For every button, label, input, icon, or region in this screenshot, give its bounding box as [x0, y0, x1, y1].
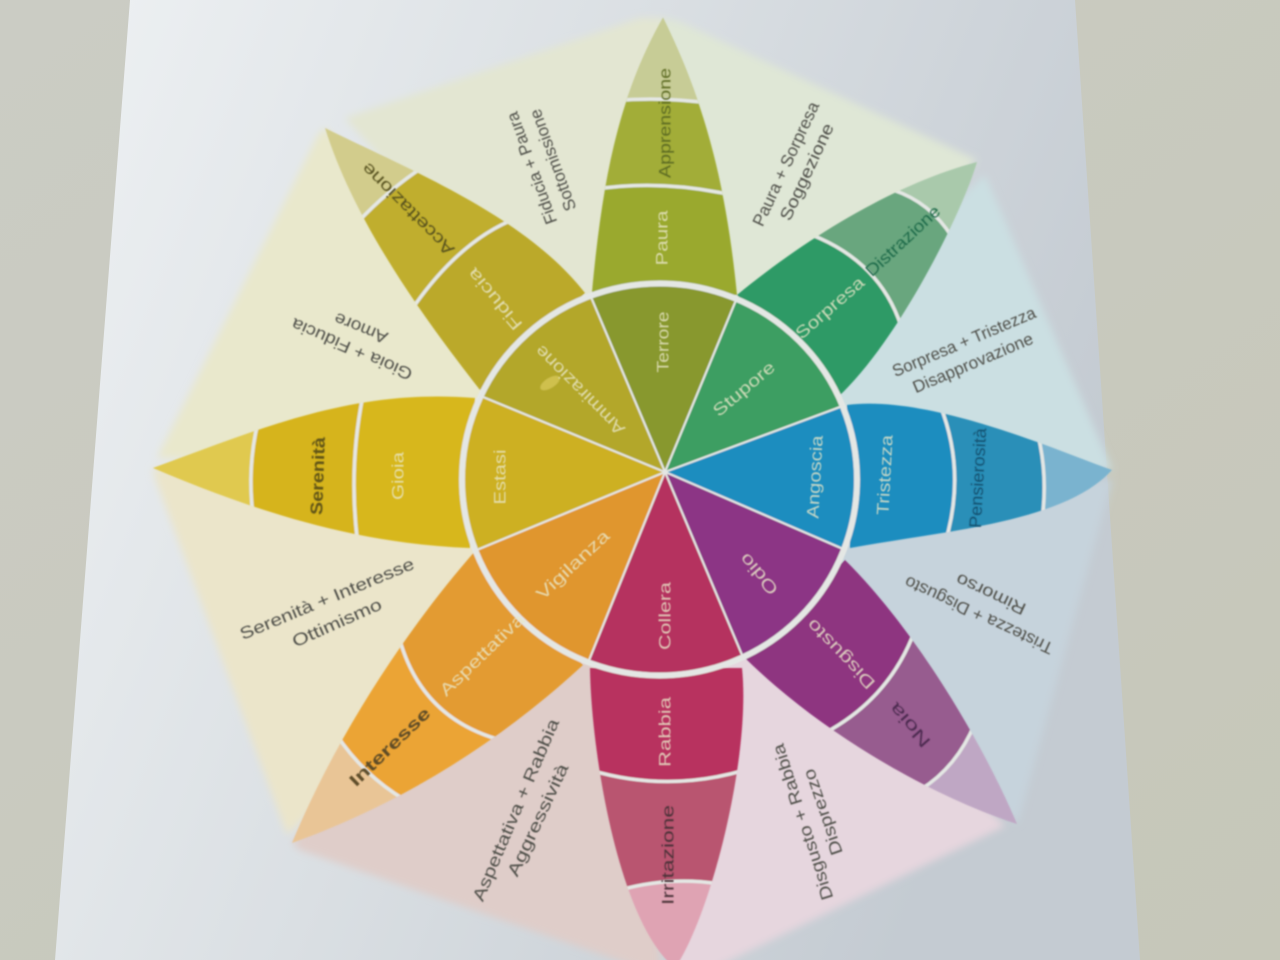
dyad: Fiducia + Paura: Fiducia + Paura	[503, 109, 561, 227]
label: Collera: Collera	[656, 581, 674, 650]
label: Terrore: Terrore	[654, 312, 672, 372]
petal: bottom right (Noia, Disgusto)	[746, 560, 1017, 824]
label: Vigilanza: Vigilanza	[533, 526, 614, 604]
label: Stupore: Stupore	[709, 358, 779, 420]
petal: top (Apprensione, Paura)	[591, 18, 738, 296]
dyad: Paura + Sorpresa: Paura + Sorpresa	[749, 98, 823, 229]
label: Pensierosita: Pensierosità	[966, 427, 990, 528]
petal: top right (Distrazione, Sorpresa)	[736, 162, 978, 395]
dyad: Paura + Sorpresa: Soggezione	[776, 120, 838, 224]
wheel	[130, 0, 1130, 960]
dyad: Disgusto + Rabbia	[769, 741, 847, 902]
label: Distrazione: Distrazione	[862, 202, 944, 280]
label: Fiducia: Fiducia	[463, 264, 526, 334]
label: Gioia: Gioia	[388, 451, 408, 500]
dyad: Aspettativa + Rabbia	[469, 715, 573, 904]
dyad: Aspettativa + Rabbia: Aggressività	[504, 760, 573, 879]
petal: bottom (Irritazione, Rabbia)	[589, 666, 744, 960]
label: Accettazione: Accettazione	[358, 159, 458, 259]
icon: small leaf mark on Ammirazione	[538, 373, 562, 393]
dyad: Gioia + Fiducia: Amore	[331, 309, 391, 347]
dyad: Sorpresa + Tristezza: Sorpresa + Tristezza	[889, 303, 1039, 381]
dyad: Disgusto + Rabbia: Disgusto + Rabbia	[769, 741, 837, 902]
dyad: Sorpresa + Tristezza: Disapprovazione	[910, 329, 1036, 397]
label: Aspettativa: Aspettativa	[436, 609, 529, 700]
label: Disgusto: Disgusto	[803, 615, 879, 693]
label: Odio: Odio	[736, 549, 782, 599]
label: Irritazione: Irritazione	[658, 805, 678, 905]
label: Serenita: Serenità	[307, 436, 329, 515]
label: Noia: Noia	[885, 698, 935, 751]
label: Apprensione: Apprensione	[656, 68, 674, 178]
label: Interesse: Interesse	[346, 704, 434, 790]
dyad: Tristezza + Disgusto: Rimorso	[953, 570, 1029, 618]
dyad: Disgusto + Rabbia: Disprezzo	[799, 766, 847, 858]
dyad: Aspettativa + Rabbia: Aspettativa + Rabbia	[469, 715, 563, 904]
label: Estasi: Estasi	[490, 450, 510, 504]
label: Sorpresa: Sorpresa	[792, 273, 869, 343]
dyad: Serenita + Interesse: Serenità + Interesse	[237, 554, 417, 644]
wheel ring	[462, 284, 857, 676]
dyad: Serenita + Interesse	[237, 554, 417, 651]
dyad: Tristezza + Disgusto: Tristezza + Disgusto	[902, 572, 1056, 658]
emotion labels	[307, 68, 990, 905]
petal: left (Serenita, Gioia)	[152, 396, 476, 549]
petal: right (Pensierosita, Tristezza)	[846, 402, 1112, 549]
dyad: Serenita + Interesse: Ottimismo	[289, 595, 385, 651]
label: Paura: Paura	[652, 210, 672, 266]
dyad labels	[237, 98, 1056, 904]
label: Rabbia: Rabbia	[656, 696, 674, 767]
label: Ammirazione: Ammirazione	[531, 341, 629, 439]
label: Angoscia: Angoscia	[803, 434, 827, 519]
octagon pale dyad sections	[153, 18, 1112, 960]
dyad: Fiducia + Paura: Sottomissione	[526, 106, 580, 214]
dyad: Gioia + Fiducia: Gioia + Fiducia	[288, 314, 415, 384]
petal: bottom left (Interesse, Aspettativa)	[292, 552, 584, 844]
petal: top left (Accettazione, Fiducia)	[324, 128, 586, 390]
inner circle wedges	[466, 286, 850, 669]
label: Tristezza: Tristezza	[873, 434, 897, 515]
